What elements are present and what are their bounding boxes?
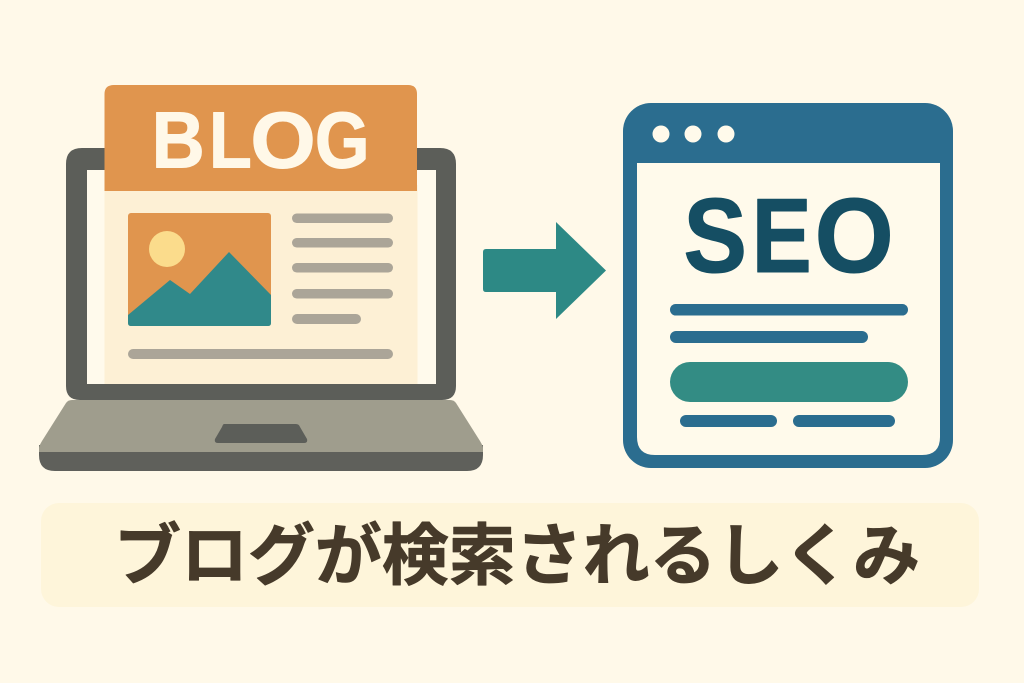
laptop screen frame — [66, 148, 456, 400]
mountains — [128, 252, 271, 326]
search bar pill — [670, 362, 908, 402]
heading: SEO — [683, 176, 894, 295]
image thumbnail — [128, 213, 271, 326]
text lines — [128, 214, 393, 359]
base lower edge — [39, 445, 483, 471]
window content area — [637, 163, 940, 455]
window title bar dots — [652, 126, 734, 142]
heading: SEO: E — [752, 176, 812, 295]
sun — [149, 231, 185, 267]
heading: BLOG — [152, 95, 370, 185]
touchpad — [215, 424, 307, 443]
laptop screen — [87, 170, 436, 384]
page header — [104, 85, 417, 191]
page body — [104, 185, 418, 384]
heading: BLOG: G — [315, 95, 370, 184]
heading: BLOG: B — [152, 96, 205, 185]
title banner — [41, 503, 979, 607]
icon: laptop with blog page — [39, 85, 483, 471]
heading: SEO: S — [683, 177, 747, 295]
base top — [39, 400, 483, 452]
heading: BLOG: O — [250, 96, 316, 185]
heading: BLOG: L — [209, 95, 252, 184]
blog page — [104, 85, 418, 384]
thumbnail background — [128, 213, 271, 326]
heading: SEO: O — [815, 177, 894, 295]
arrow — [483, 222, 606, 319]
window frame — [623, 103, 953, 468]
laptop base — [39, 400, 483, 471]
title text: ブログが検索されるしくみ — [114, 519, 920, 594]
banner background — [41, 503, 979, 607]
content lines — [670, 304, 908, 427]
icon: SEO browser window — [623, 103, 953, 468]
